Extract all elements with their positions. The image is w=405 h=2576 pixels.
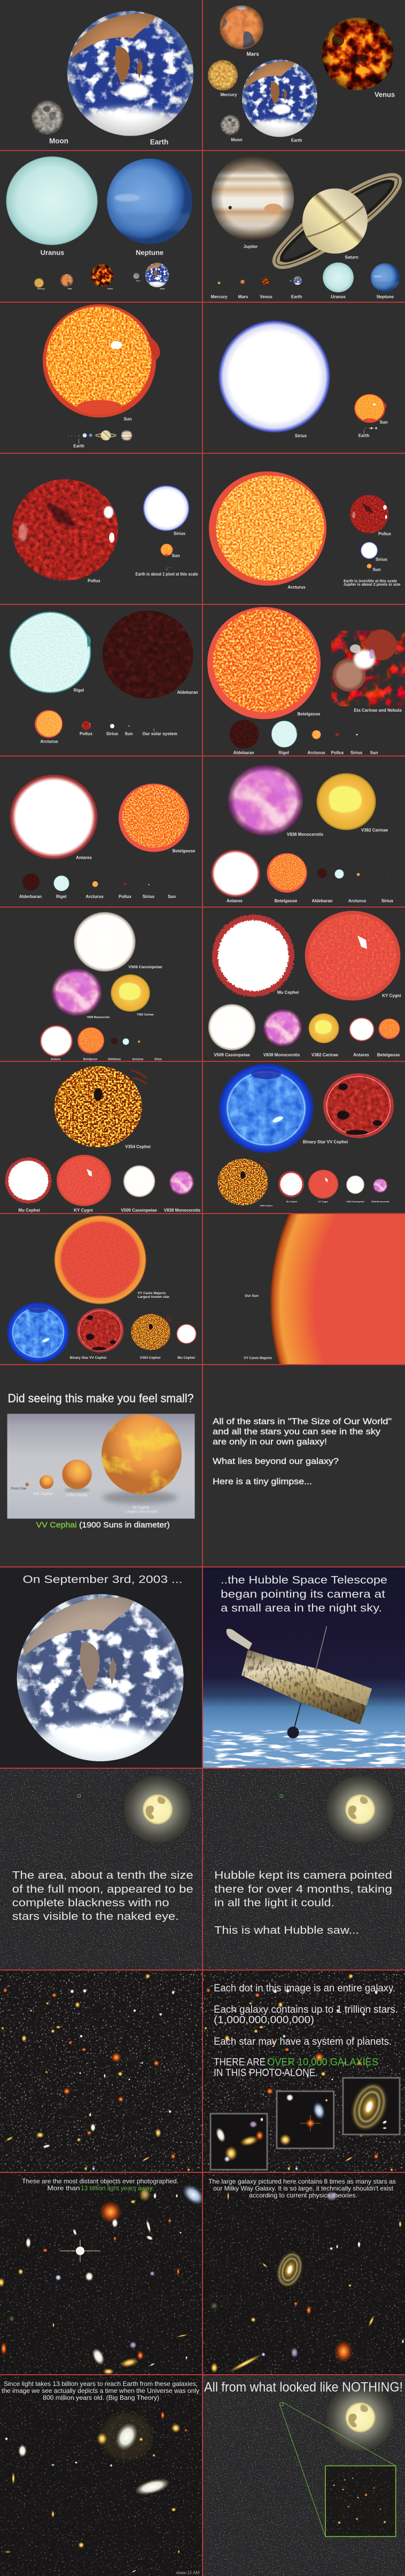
body text: there for over 4 months, taking [214, 1884, 392, 1895]
body text: More than [47, 2185, 80, 2192]
label: Arcturus: Arcturus [287, 585, 306, 589]
comparison stars row: Aldebaran [311, 899, 333, 903]
star: v354 cephei [54, 1066, 146, 1147]
comparison stars row: Arcturus [85, 894, 104, 899]
comparison stars row [208, 1004, 400, 1057]
panel: inner planets [208, 5, 395, 145]
body text: OVER 10,000 GALAXIES [267, 2057, 378, 2068]
star: rigel [10, 612, 91, 693]
star: sirius [110, 724, 114, 728]
comparison stars row [7, 1303, 197, 1362]
label: Earth: Earth [291, 138, 302, 143]
small planets row: Uranus [331, 295, 346, 299]
comparison stars row: Binary Star VV Cephei [70, 1356, 107, 1360]
panel: hubble kept its camera pointed [203, 1768, 405, 1970]
marker: green square [280, 1795, 283, 1797]
inset: galaxy close up 1 [211, 2114, 267, 2170]
comparison stars row: Mu Cephei [18, 1208, 40, 1213]
spiral galaxy [273, 2249, 306, 2290]
comparison stars row: Sirius [154, 1058, 162, 1061]
label: Jupiter: Jupiter [244, 245, 258, 249]
photo: earth [17, 1594, 184, 1778]
panel: uranus and neptune [6, 156, 192, 290]
panel: mu cephei and ky cygni [208, 911, 401, 1057]
speckled starfield [0, 1768, 203, 1970]
label: Earth: Earth [150, 138, 168, 146]
star: sirius [361, 542, 378, 559]
star: arcturus [209, 471, 326, 586]
label: Mu Cephei: Mu Cephei [277, 990, 299, 995]
small inner planets row [34, 263, 169, 290]
star: arcturus [35, 710, 63, 738]
comparison stars row [211, 850, 394, 903]
star: sirius [219, 320, 330, 432]
small planets row [211, 263, 400, 299]
comparison stars row: V509 Cassiopeiae [346, 1200, 365, 1203]
star: vy canis majoris [54, 1216, 146, 1304]
comparison stars row: V382 Carinae [311, 1053, 339, 1057]
body text: Each star may have a system of planets. [214, 2036, 392, 2047]
panel: the sun [43, 304, 160, 448]
label: Rigel: Rigel [74, 688, 84, 693]
star: betelgeuse [207, 607, 321, 719]
body text: This is what Hubble saw... [214, 1925, 359, 1936]
label: Sun: Sun [379, 420, 388, 425]
label: Uranus: Uranus [41, 249, 64, 256]
label: V354 Cephei: V354 Cephei [125, 1145, 151, 1149]
panel: hubble space telescope [203, 1567, 405, 1768]
comparison stars row: Betelgeuse [377, 1053, 400, 1057]
comparison stars row: KY Cygni [318, 1200, 328, 1203]
panel: light takes 13 billion years [0, 2375, 203, 2576]
small planets row: Venus [260, 295, 272, 299]
star: vv cephei red [324, 1074, 393, 1137]
label: Eta Carinae and Nebula: Eta Carinae and Nebula [354, 708, 402, 713]
planet: venus [322, 18, 393, 90]
body text: complete blackness with no [12, 1897, 169, 1909]
comparison stars row: Mu Cephei [286, 1200, 297, 1203]
planet: uranus [6, 156, 98, 245]
star: sun [128, 726, 129, 727]
other galaxies [210, 2191, 404, 2374]
comparison stars row: Mu Cephei [177, 1356, 195, 1360]
comparison stars row [19, 873, 176, 899]
note: earth invisible: Earth is invisible at this scale [344, 578, 397, 583]
comparison stars row: V509 Cassiopeiae [214, 1053, 250, 1057]
note: earth invisible: Jupiter is about 2 pixels in size [343, 582, 401, 586]
star: v382 carinae [111, 974, 150, 1012]
star: betelgeuse [119, 784, 189, 852]
planet: jupiter [212, 155, 294, 241]
label: Moon: Moon [231, 138, 243, 142]
small inner planets row: Venus [107, 288, 113, 290]
label: Sun: Sun [172, 553, 180, 558]
comparison stars row: Antares [51, 1058, 61, 1061]
comparison stars row: Aldebaran [108, 1058, 121, 1061]
body text: The area, about a tenth the size [12, 1870, 193, 1881]
label: Binary Star VV Cephei: Binary Star VV Cephei [303, 1139, 348, 1145]
star: sun [354, 394, 386, 423]
body text: IN THIS PHOTO ALONE. [214, 2067, 318, 2078]
small planets row: Mars [238, 295, 248, 299]
moon with halo [123, 1775, 192, 1844]
photo: star spheres size comparison: KW Sagitari [34, 1492, 53, 1496]
body text: Since light takes 13 billion years to reach Earth from these galaxies, [4, 2380, 198, 2388]
panel: arcturus [209, 471, 401, 589]
comparison stars row: Sirius [351, 751, 363, 755]
comparison stars row [218, 1159, 390, 1207]
panel: hubble deep field [0, 1970, 202, 2172]
small planets row: Neptune [377, 295, 394, 299]
star: pollux [82, 721, 91, 730]
page background [0, 0, 405, 1567]
label: Moon: Moon [49, 137, 68, 145]
panel: most distant objects [0, 2172, 208, 2375]
planet: moon [221, 115, 240, 135]
heading: Did seeing this make you feel small? [7, 1391, 193, 1405]
comparison stars row [5, 1155, 201, 1213]
speckled starfield [203, 1768, 405, 1970]
zoom callout lines [280, 2402, 396, 2536]
comparison stars row: V838 Monocerotis [371, 1200, 390, 1203]
panel: v354 cephei [5, 1066, 201, 1213]
body text: Hubble kept its camera pointed [214, 1870, 392, 1881]
panel: moon and earth [32, 11, 193, 148]
body text: the image we see actually depicts a time when the Universe was only [2, 2387, 199, 2394]
galaxies [0, 2180, 208, 2375]
panel: rigel and aldebaran [10, 611, 198, 744]
comparison stars row: V354 Cephei [140, 1356, 161, 1360]
label: Venus: Venus [375, 91, 395, 98]
photo: star spheres size comparison [7, 1414, 194, 1518]
comparison stars row: Aldebaran [233, 751, 254, 755]
star: v838 monocerotis [228, 765, 303, 836]
panel: what lies beyond our galaxy [213, 1417, 394, 1486]
photo: star spheres size comparison: Largest Star Known [125, 1510, 158, 1514]
small planets row: Earth [291, 295, 302, 299]
panel: gas giants [211, 155, 405, 299]
planet dots with earth marker [359, 427, 377, 438]
star: v509 cassiopeiae [74, 912, 136, 972]
label: Arcturus: Arcturus [40, 739, 58, 744]
label: Pollux: Pollux [88, 579, 101, 583]
label: Betelgeuse: Betelgeuse [173, 849, 196, 853]
moon with halo [326, 2383, 394, 2452]
body text: 800 million years old. (Big Bang Theory) [43, 2394, 159, 2401]
panel: large galaxy [203, 2172, 405, 2374]
heading: On September 3rd, 2003 ... [22, 1574, 183, 1586]
panel: september 3rd 2003 earth [0, 1567, 203, 1778]
label: our solar system: Our solar system [142, 731, 177, 736]
marker: green square [280, 2402, 283, 2406]
body text: according to current physics theories. [249, 2192, 357, 2199]
comparison stars row: Alderbaran [19, 894, 42, 899]
comparison stars row: Rigel [56, 894, 66, 899]
speckled starfield [203, 2375, 405, 2576]
star: antares [10, 775, 97, 859]
body text: (1,000,000,000,000) [214, 2014, 314, 2026]
label: V382 Carinae: V382 Carinae [361, 828, 388, 833]
panel: each dot is a galaxy [203, 1970, 405, 2172]
label: KY Cygni: KY Cygni [382, 993, 401, 998]
body text: are only in our own galaxy! [213, 1437, 327, 1446]
star: pollux [12, 479, 118, 581]
small inner planets row: Mars [68, 288, 72, 290]
small inner planets row: Earth [160, 288, 165, 290]
star: vv cephei blue [219, 1064, 313, 1153]
body text: Each dot in this image is an entire galaxy. [214, 1983, 395, 1994]
panel: binary star vv cephei [218, 1064, 393, 1207]
heading: began pointing its camera at [221, 1589, 386, 1601]
label: Betelgeuse: Betelgeuse [298, 712, 321, 716]
icon: hubble telescope [227, 1626, 372, 1738]
comparison stars row [40, 1025, 162, 1061]
body text: THERE ARE [214, 2057, 266, 2068]
label: Our Sun: Our Sun [245, 1294, 259, 1298]
body text: in all the light it could. [214, 1897, 334, 1909]
star: v838 monocerotis [52, 968, 102, 1015]
star: ky cygni [305, 911, 400, 1001]
label: Antares: Antares [76, 855, 92, 860]
planet: mars [220, 5, 263, 49]
label: Sun: Sun [124, 731, 133, 736]
comparison stars row: Betelgeuse [83, 1058, 98, 1061]
solar system to scale: Earth [73, 444, 84, 448]
comparison stars row: Sirius [381, 899, 394, 903]
small inner planets row: Moon [136, 280, 141, 282]
body text: 13 billion light years away. [81, 2185, 154, 2192]
label: VY Canis Majoris: VY Canis Majoris [138, 1291, 166, 1295]
comparison stars row: Arcturus [307, 751, 325, 755]
planet: moon [32, 100, 64, 135]
galaxies [4, 2411, 188, 2573]
planet dots [167, 568, 172, 570]
body text: What lies beyond our galaxy? [213, 1456, 339, 1466]
label: VY Canis Majoris: VY Canis Majoris [244, 1356, 272, 1360]
star: sun [367, 564, 372, 569]
label: Pollux: Pollux [378, 532, 392, 536]
heading: ..the Hubble Space Telescope [221, 1574, 387, 1586]
star: mu cephei [212, 915, 294, 997]
panel: antares [10, 775, 196, 899]
star: v382 carinae [316, 773, 376, 830]
body text: Each galaxy contains up to 1 trillion stars. [214, 2004, 398, 2015]
marker: solar system [153, 728, 154, 731]
label: Saturn: Saturn [345, 255, 359, 259]
star: eta carinae nebula [331, 629, 405, 706]
label: V838 Monocerotis: V838 Monocerotis [87, 1016, 110, 1019]
panel: betelgeuse [207, 607, 405, 755]
comparison stars row: Pollux [331, 751, 344, 755]
body text: All of the stars in "The Size of Our World" [213, 1417, 392, 1426]
label: VY Canis Majoris: Largest known star [138, 1295, 170, 1298]
comparison stars row: V354 Cephei [260, 1204, 272, 1207]
body text: our Milky Way Galaxy. It is so large, it technically shouldn't exist [213, 2185, 394, 2192]
comparison stars row: Betelgeuse [275, 899, 298, 903]
label: Pollux: Pollux [80, 731, 93, 736]
photo: star spheres size comparison: Pistol Star [11, 1487, 27, 1491]
comparison stars row: KY Cygni [74, 1208, 93, 1213]
panel: v838 and v382 [211, 765, 394, 903]
planet: earth [67, 11, 193, 148]
speckled galaxies [0, 2172, 203, 2374]
body text: stars visible to the naked eye. [12, 1911, 179, 1923]
label: V382 Carinae: V382 Carinae [137, 1013, 154, 1017]
speckled galaxies [203, 2172, 405, 2374]
comparison stars row: V838 Monocerotis [263, 1053, 300, 1057]
panel: v509 cassiopeiae [40, 912, 162, 1061]
comparison stars row: Arcturus [348, 899, 367, 903]
comparison stars row: Sun [370, 751, 378, 755]
label: Mars: Mars [246, 51, 259, 58]
star: sirius [143, 485, 189, 531]
label: Sun: Sun [372, 567, 381, 572]
label: Sirius: Sirius [376, 557, 388, 562]
cloud tops [203, 1730, 405, 1768]
photo: star spheres size comparison: W Cephai [133, 1506, 150, 1510]
comparison stars row: Sun [168, 894, 176, 899]
label: Sirius: Sirius [174, 531, 186, 536]
comparison stars row: Rigel [278, 751, 289, 755]
body text: Here is a tiny glimpse... [213, 1477, 312, 1486]
comparison stars row: V509 Cassiopeiae [121, 1208, 157, 1213]
panel: did seeing this make you feel small [7, 1391, 194, 1530]
comparison stars row: Sirius [143, 894, 155, 899]
star: pollux [350, 495, 388, 533]
caption: VV Cephai (1900 Suns in diameter) [36, 1521, 170, 1530]
body text: and all the stars you can see in the sky [213, 1427, 380, 1436]
watermark: www.JJ.AM [176, 2570, 199, 2575]
comparison stars row: Antares [353, 1053, 369, 1057]
body text: These are the most distant objects ever photographed. [22, 2177, 178, 2185]
label: Sirius: Sirius [295, 434, 307, 438]
planet: saturn [268, 166, 405, 277]
small planets row: Mercury [211, 295, 228, 299]
inset: spiral galaxy close up [343, 2078, 400, 2134]
label: Mercury: Mercury [220, 92, 237, 97]
marker: green square [78, 1795, 80, 1797]
body text: of the full moon, appeared to be [12, 1884, 193, 1895]
label: V509 Cassiopeiae: V509 Cassiopeiae [128, 964, 162, 970]
photo: star spheres size comparison: V354 Cephai [66, 1494, 88, 1497]
star: sun [160, 543, 173, 556]
panel: area of the night sky [0, 1768, 203, 1970]
note: earth scale: Earth is about 1 pixel at this scale [136, 572, 198, 577]
panel: sirius [219, 320, 388, 438]
inset: deep field thumbnail [325, 2466, 396, 2536]
comparison stars row: Arcturus [133, 1058, 144, 1061]
panel: vy canis majoris [7, 1216, 197, 1362]
speckled galaxies [0, 2375, 203, 2576]
body text: The large galaxy pictured here contains 8 times as many stars as [208, 2178, 396, 2185]
label: V838 Monocerotis: V838 Monocerotis [287, 832, 324, 837]
star: sun [43, 304, 160, 417]
planet: earth [242, 60, 317, 145]
small inner planets row: Mercury [37, 288, 45, 290]
planet: neptune [107, 159, 192, 244]
moon with halo [326, 1775, 394, 1844]
heading: a small area in the night sky. [221, 1602, 382, 1614]
label: Neptune: Neptune [136, 249, 163, 256]
comparison stars row: Antares [227, 899, 243, 903]
comparison stars row: Pollux [119, 894, 132, 899]
deep field background [203, 1970, 405, 2172]
planet dots with earth marker: Earth [359, 434, 369, 438]
comparison stars row: V838 Monocerotis [164, 1208, 201, 1213]
label: Sirius: Sirius [106, 731, 119, 736]
panel: our sun versus vy canis majoris [244, 1214, 405, 1364]
star: aldebaran [103, 611, 193, 698]
inset: galaxy close up 2 [277, 2091, 334, 2148]
planet: mercury [208, 60, 238, 91]
panel: all from what looked like nothing [203, 2375, 405, 2576]
solar system to scale [68, 429, 133, 448]
label: Aldebaran: Aldebaran [177, 690, 198, 695]
comparison stars row [230, 720, 378, 755]
star: vy canis majoris close up [270, 1214, 405, 1364]
panel: pollux [12, 479, 198, 583]
label: Sun: Sun [123, 416, 132, 422]
